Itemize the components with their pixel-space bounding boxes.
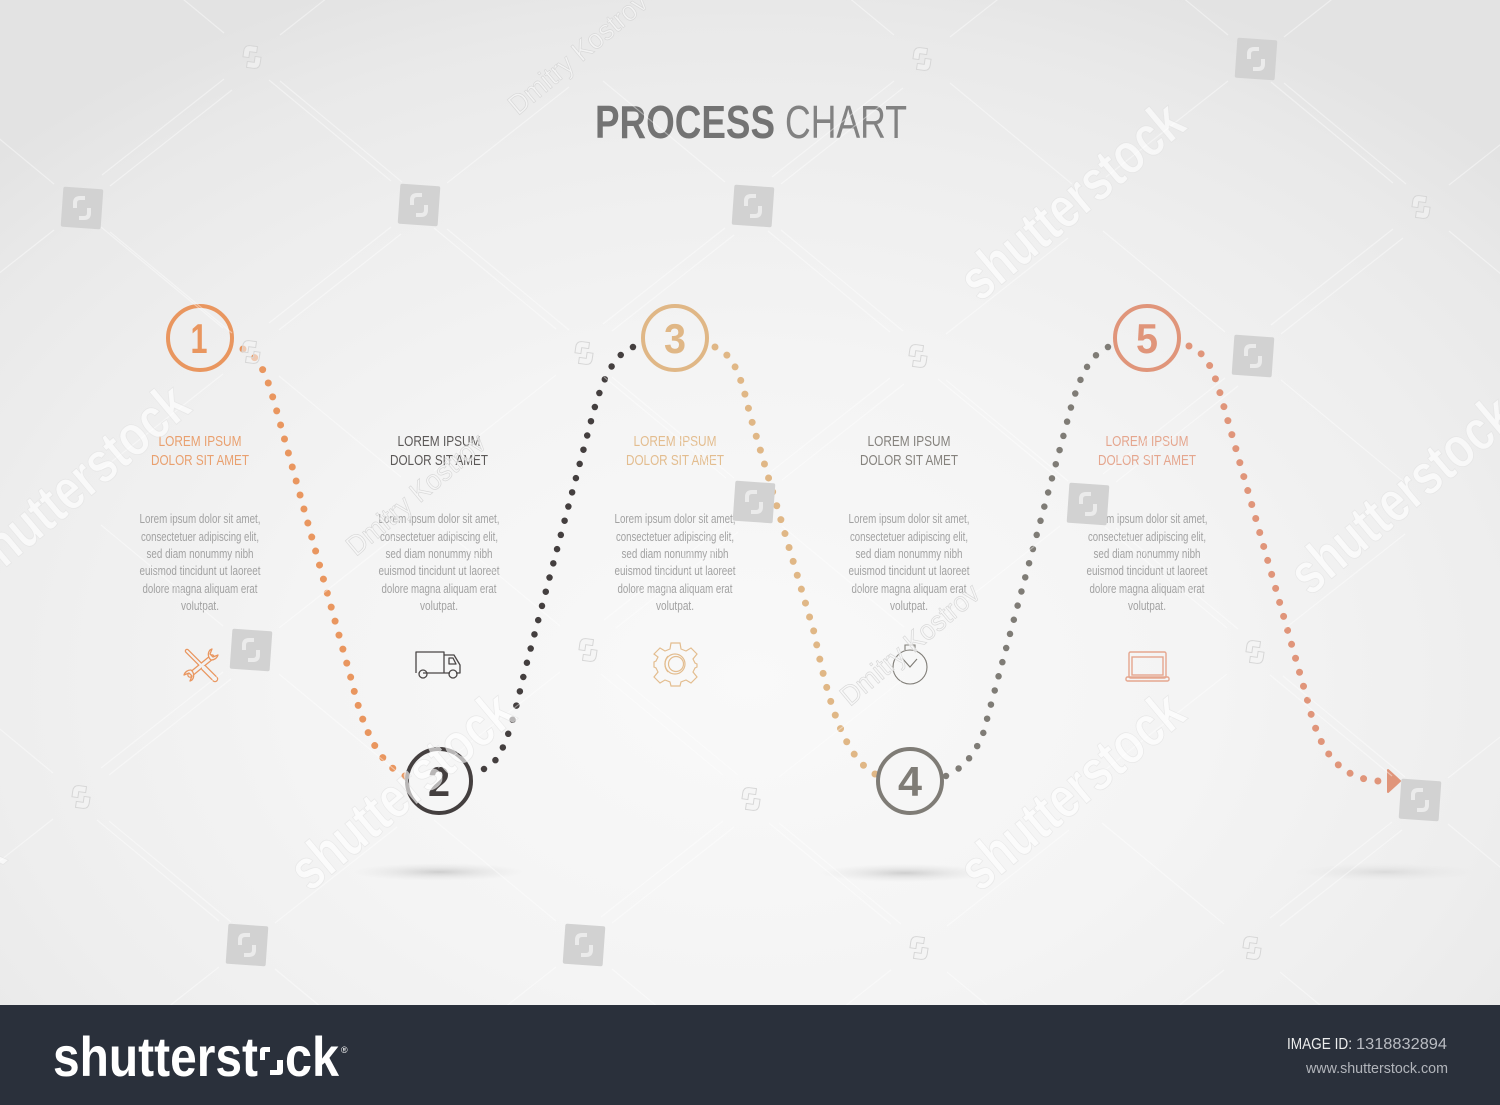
dotted curve: dark segment [484, 347, 633, 769]
text block 5 [1086, 433, 1208, 613]
icon: stopwatch [893, 645, 927, 684]
watermark text: shutterstock [947, 678, 1197, 903]
text block 2: dolore magna aliquam erat [382, 582, 497, 596]
text block 3 [614, 433, 736, 613]
watermark text: Dmitry Kostrov [340, 427, 492, 562]
text block 3: sed diam nonummy nibh [622, 547, 729, 561]
text block 1: euismod tincidunt ut laoreet [140, 564, 261, 578]
icon: laptop [1126, 652, 1169, 681]
watermark text: shutterstock [947, 88, 1197, 313]
step 2 marker [407, 749, 471, 813]
footer bar [0, 1005, 1500, 1105]
step 4 marker: 4 [898, 758, 923, 805]
text block 4: Lorem ipsum dolor sit amet, [848, 512, 970, 526]
floor shadows [354, 863, 1475, 882]
icon: wrench and screwdriver [184, 649, 218, 681]
text block 4: euismod tincidunt ut laoreet [848, 564, 970, 578]
text block 1: LOREM IPSUM [158, 433, 242, 450]
text block 3: Lorem ipsum dolor sit amet, [614, 512, 736, 526]
image number: 1318832894 [1356, 1036, 1447, 1053]
text block 5: Lorem ipsum dolor sit amet, [1086, 512, 1208, 526]
arrow head [1388, 770, 1400, 792]
text block 2: DOLOR SIT AMET [390, 452, 488, 469]
text block 5: consectetuer adipiscing elit, [1088, 530, 1206, 544]
step 1 marker [168, 306, 232, 370]
text block 5: sed diam nonummy nibh [1094, 547, 1201, 561]
text block 3: euismod tincidunt ut laoreet [614, 564, 736, 578]
text block 4 [848, 433, 970, 613]
text block 2: euismod tincidunt ut laoreet [378, 564, 500, 578]
text block 1 [140, 433, 261, 613]
text block 2: LOREM IPSUM [398, 433, 480, 450]
text block 2: Lorem ipsum dolor sit amet, [378, 512, 500, 526]
text block 3: volutpat. [656, 599, 694, 613]
shutterstock logo: ® [341, 1045, 348, 1055]
text block 4: dolore magna aliquam erat [852, 582, 967, 596]
text block 5: DOLOR SIT AMET [1098, 452, 1196, 469]
text block 4: consectetuer adipiscing elit, [850, 530, 968, 544]
watermark text: Dmitry Kostrov [834, 577, 986, 712]
title: PROCESS [595, 96, 775, 148]
text block 2: volutpat. [420, 599, 458, 613]
step 1 marker: 1 [190, 315, 208, 362]
text block 4: sed diam nonummy nibh [856, 547, 963, 561]
step 2 marker: 2 [428, 758, 450, 805]
shutterstock logo: ck [285, 1025, 340, 1088]
text block 1: consectetuer adipiscing elit, [141, 530, 259, 544]
title: CHART [785, 96, 907, 148]
watermark text: shutterstock [277, 678, 527, 903]
text block 5: euismod tincidunt ut laoreet [1086, 564, 1208, 578]
text block 4: LOREM IPSUM [868, 433, 950, 450]
icon: gear [654, 643, 697, 686]
step 3 marker [643, 306, 707, 370]
text block 2: sed diam nonummy nibh [386, 547, 493, 561]
text block 3: consectetuer adipiscing elit, [616, 530, 734, 544]
text block 1: dolore magna aliquam erat [142, 582, 258, 596]
text block 4: volutpat. [890, 599, 928, 613]
dotted curve: salmon segment [1189, 346, 1378, 781]
text block 3: LOREM IPSUM [634, 433, 716, 450]
text block 2 [378, 433, 500, 613]
text block 4: DOLOR SIT AMET [860, 452, 958, 469]
text block 5: LOREM IPSUM [1106, 433, 1188, 450]
text block 1: sed diam nonummy nibh [146, 547, 254, 561]
text block 2: consectetuer adipiscing elit, [380, 530, 498, 544]
step 5 marker: 5 [1136, 315, 1158, 362]
website: www.shutterstock.com [1305, 1061, 1448, 1077]
step 4 marker [878, 749, 942, 813]
text block 1: volutpat. [181, 599, 219, 613]
text block 3: dolore magna aliquam erat [618, 582, 733, 596]
step 3 marker: 3 [664, 315, 686, 362]
text block 1: DOLOR SIT AMET [151, 452, 249, 469]
text block 3: DOLOR SIT AMET [626, 452, 724, 469]
shutterstock logo: shutterst [53, 1025, 258, 1088]
dotted curve: orange segment [243, 349, 405, 776]
icon: truck [416, 652, 460, 678]
text block 1: Lorem ipsum dolor sit amet, [140, 512, 260, 526]
text block 5: dolore magna aliquam erat [1090, 582, 1205, 596]
text block 5: volutpat. [1128, 599, 1166, 613]
step 5 marker [1115, 306, 1179, 370]
dotted curve: grey segment [946, 347, 1108, 776]
image id: IMAGE ID: [1287, 1036, 1352, 1053]
dotted curve: tan segment [715, 347, 875, 774]
